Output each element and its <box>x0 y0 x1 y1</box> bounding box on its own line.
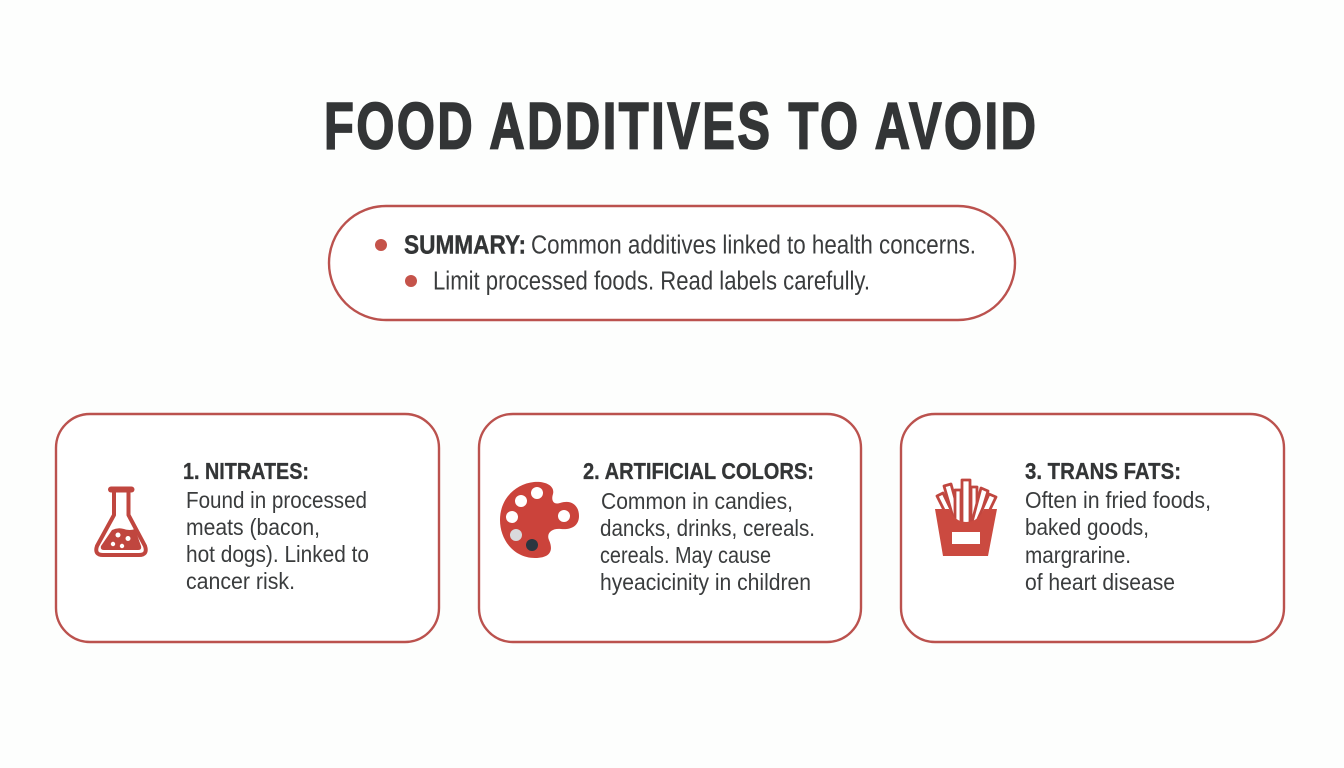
summary outline <box>329 206 1015 320</box>
card outline 3 <box>901 414 1284 642</box>
artificial colors text: dancks, drinks, cereals. <box>600 515 815 541</box>
icon: flask <box>96 486 146 555</box>
title: FOOD ADDITIVES TO AVOID <box>324 89 1036 163</box>
trans fats text: 3. TRANS FATS: <box>1025 458 1181 484</box>
trans fats text: Often in fried foods, <box>1025 487 1211 513</box>
artificial colors text: hyeacicinity in children <box>600 569 811 595</box>
nitrates text: 1. NITRATES: <box>183 458 309 484</box>
summary bullet 1 <box>375 239 387 251</box>
nitrates text: Found in processed <box>186 487 367 513</box>
panel: trans fats <box>901 414 1284 642</box>
icon: fries <box>935 480 997 556</box>
panel: nitrates <box>56 414 439 642</box>
summary line 1: SUMMARY: <box>404 232 526 260</box>
trans fats text: baked goods, <box>1025 514 1149 540</box>
artificial colors text: Common in candies, <box>601 488 793 514</box>
card outline 1 <box>56 414 439 642</box>
trans fats text: of heart disease <box>1025 569 1175 595</box>
trans fats text: margrarine. <box>1025 542 1131 568</box>
artificial colors text <box>583 458 815 595</box>
artificial colors text: cereals. May cause <box>600 542 771 568</box>
nitrates text <box>183 458 369 594</box>
trans fats text <box>1025 458 1211 595</box>
nitrates text: cancer risk. <box>186 568 295 594</box>
summary bullet 2 <box>405 275 417 287</box>
artificial colors text: 2. ARTIFICIAL COLORS: <box>583 458 814 484</box>
card outline 2 <box>479 414 861 642</box>
summary line 2: Limit processed foods. Read labels carefully. <box>433 268 870 296</box>
panel: summary <box>329 206 1015 320</box>
summary line 1: Common additives linked to health concerns. <box>531 232 976 260</box>
nitrates text: hot dogs). Linked to <box>186 541 369 567</box>
icon: palette <box>500 482 579 558</box>
panel: artificial colors <box>479 414 861 642</box>
nitrates text: meats (bacon, <box>186 514 320 540</box>
